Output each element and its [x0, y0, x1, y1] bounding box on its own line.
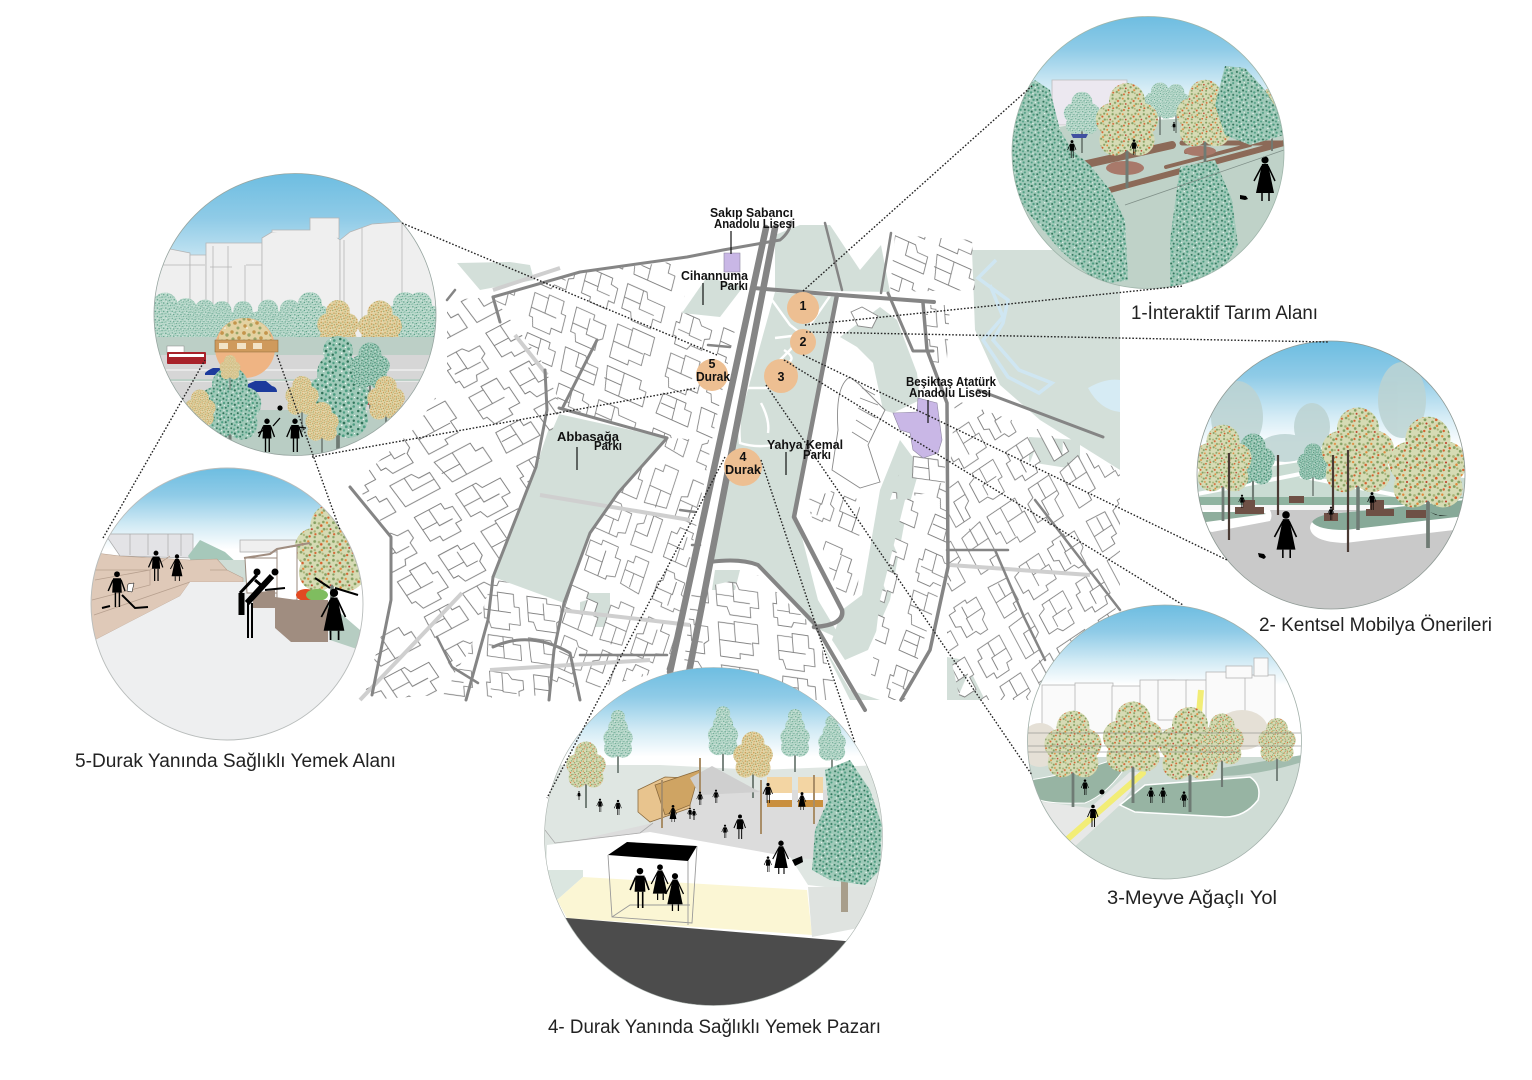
white paths: [1198, 472, 1396, 497]
stall windows: [219, 343, 262, 349]
canopy: [218, 318, 272, 340]
back trees: [1064, 82, 1191, 153]
map: numbered markers: [696, 292, 819, 486]
cream band: [557, 877, 812, 935]
ground: [1027, 757, 1302, 880]
right island: [1310, 498, 1465, 543]
grey buildings: [105, 534, 300, 558]
scene 5: street view with stop: [143, 173, 441, 472]
lower green: [150, 410, 440, 460]
map: place names: Cihannuma: [681, 269, 749, 283]
map: marker numbers: Durak: [725, 463, 761, 477]
left lawn: [1030, 758, 1122, 803]
poplars: [603, 706, 846, 775]
plaza: [88, 582, 360, 745]
seated and standing people: [102, 551, 358, 640]
visitors: [1239, 492, 1448, 559]
fruit tree: [295, 504, 369, 630]
map: purple school parcels: [724, 253, 942, 458]
map: river: [978, 260, 1120, 412]
planter beds: [1060, 143, 1284, 190]
background tree row: [143, 292, 441, 366]
round planter: [1106, 161, 1144, 175]
map: place names: Sakıp Sabancı: [710, 206, 793, 220]
map: green park areas: [457, 225, 1120, 700]
scene 6 outline: [91, 468, 363, 740]
sidewalk: [546, 832, 824, 900]
map: building blocks: [355, 235, 1120, 700]
blue car far: [205, 368, 222, 375]
fruit trees: [1194, 408, 1467, 548]
two figures with ball: [258, 405, 306, 452]
map: place names: Parkı: [594, 439, 622, 453]
orange stop highlight: [215, 318, 275, 378]
map: place names: Anadolu Lisesi: [909, 386, 991, 400]
label: 5 food area: 5-Durak Yanında Sağlıklı Yemek Alanı: [75, 751, 396, 772]
building: [1052, 80, 1127, 125]
map: marker numbers: Durak: [696, 370, 730, 384]
scene 1: interactive farming area: [1012, 16, 1291, 290]
map: park paths: [739, 296, 830, 446]
brown stall counter: [275, 597, 328, 642]
apartment skyline: [150, 218, 436, 340]
map: roads: [350, 222, 1120, 710]
low wall: [547, 870, 583, 900]
dotted leader lines: [103, 85, 1328, 798]
front trees: [199, 336, 390, 472]
map: callout ticks: [577, 231, 928, 475]
back terrain: [544, 765, 883, 900]
fruit pile: [296, 589, 328, 601]
red bus: [167, 346, 206, 364]
right green edge: [325, 600, 360, 650]
map: marker numbers: 3: [778, 370, 785, 384]
scene 2 outline: [1197, 341, 1465, 609]
scene 3 outline: [1028, 605, 1302, 879]
fruit trees: [566, 742, 606, 808]
map: place names: Beşiktaş Atatürk: [906, 375, 996, 389]
median green: [150, 337, 440, 355]
label: 3 fruit tree path: 3-Meyve Ağaçlı Yol: [1107, 888, 1277, 909]
right lawn: [1222, 755, 1302, 776]
benches: [1235, 496, 1426, 521]
map: place names: Abbasağa: [557, 430, 620, 444]
faded distant trees: [1211, 362, 1426, 462]
map: place names: Parkı: [720, 279, 748, 293]
road: [150, 355, 440, 412]
lawn: [1198, 462, 1464, 497]
red vehicle behind trees: [339, 397, 395, 405]
map: lanes: [360, 268, 1090, 700]
scene 4 outline: [544, 668, 882, 1006]
faded trees: [1020, 710, 1268, 767]
corner planter: [808, 887, 884, 937]
ledge: [545, 823, 653, 843]
market stalls: [244, 543, 310, 608]
bus shelter: [608, 842, 697, 925]
white strip: [1201, 505, 1404, 510]
scene 5 outline: [154, 174, 436, 456]
left island: [1197, 510, 1272, 532]
green trees: [1240, 434, 1328, 500]
green trees: [1012, 66, 1284, 288]
map: place names: Parkı: [803, 448, 831, 462]
label: 1 interactive farming: 1-İnteraktif Tarım Alanı: [1131, 303, 1318, 324]
poles: [662, 758, 814, 834]
poles: [1229, 450, 1348, 552]
fruit trees: [1044, 702, 1296, 812]
people: [1081, 779, 1188, 827]
map: marker numbers: [696, 299, 807, 477]
scene 3: fruit tree path: [1020, 605, 1302, 880]
scene 1 outline: [1012, 16, 1284, 288]
scene 2: urban furniture: [1194, 341, 1467, 610]
step edges: [92, 556, 227, 615]
path edge: [1125, 150, 1284, 205]
wooden pavilion: [638, 770, 700, 822]
plaza: [571, 790, 828, 858]
scene 4: healthy food market at the stop: [544, 667, 884, 1010]
wires: [1027, 733, 1302, 752]
green hillside: [188, 540, 250, 575]
label: 4 food market: 4- Durak Yanında Sağlıklı Yemek Pazarı: [548, 1017, 881, 1038]
map: place names: Yahya Kemal: [767, 438, 843, 452]
map: marker numbers: 1: [800, 299, 807, 313]
yellow path: [1063, 773, 1143, 843]
scene 6: healthy food area by the stop: [88, 468, 369, 745]
blue car near: [240, 381, 277, 392]
map: marker numbers: 4: [740, 450, 747, 464]
map: curved building: [832, 307, 885, 488]
tan steps: [88, 552, 243, 640]
fruit trees: [1096, 80, 1291, 188]
label: 2 urban furniture: 2- Kentsel Mobilya Önerileri: [1259, 615, 1492, 636]
people and dog: [1068, 122, 1275, 201]
map: marker numbers: 2: [800, 335, 807, 349]
map: place names: Anadolu Lisesi: [714, 217, 795, 231]
map: marker numbers: 5: [709, 357, 716, 371]
site map: [350, 206, 1120, 710]
bench canopy: [1071, 134, 1088, 138]
crowd silhouettes: [577, 783, 806, 874]
ground: [1012, 118, 1284, 290]
autumn tree row: [317, 300, 402, 374]
large foreground tree: [812, 760, 882, 912]
grey pavement: [1210, 510, 1452, 609]
grey stairs: [690, 766, 760, 795]
market stalls: [767, 777, 823, 807]
center lawn: [1120, 777, 1259, 817]
dark road: [544, 918, 884, 1010]
food stalls: [215, 340, 278, 352]
faded buildings: [1042, 658, 1275, 735]
map: place names: [557, 206, 996, 462]
light paved lane: [1042, 772, 1140, 846]
